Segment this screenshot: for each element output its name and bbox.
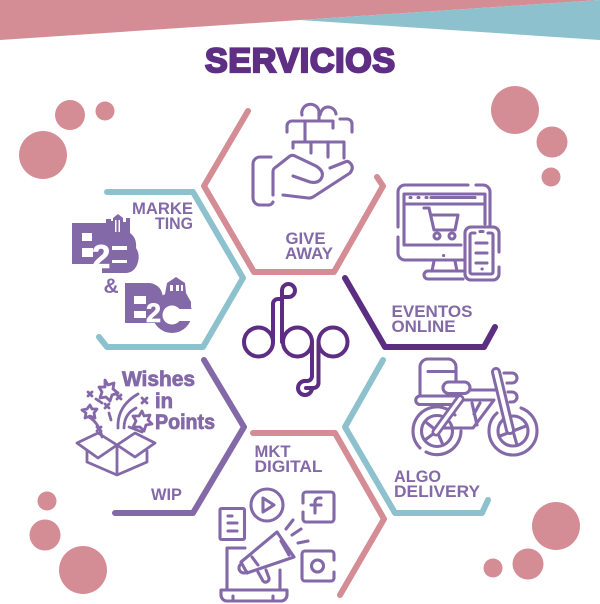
- icon: gift in hand: [253, 104, 352, 205]
- icon: delivery bike: [413, 359, 537, 455]
- panel: marketing: [72, 192, 243, 347]
- logo: dgp: [244, 284, 348, 395]
- panel: give away: [204, 104, 383, 272]
- panel: algo delivery: [345, 359, 537, 513]
- hexagon outline: marketing: [99, 192, 243, 347]
- top banner: [0, 0, 600, 40]
- label: give away: GIVE: [286, 229, 326, 248]
- panel: mkt digital: [220, 433, 384, 601]
- title: SERVICIOS: [205, 42, 395, 80]
- icon: B2B and B2C: &: [104, 275, 119, 298]
- heading: wishes in points: Wishes: [122, 368, 195, 391]
- decorative circles: bottom right: [484, 502, 580, 580]
- heading: wishes in points: [122, 368, 215, 434]
- hexagon outline: give away: [204, 111, 383, 272]
- decorative circles: bottom left: [30, 492, 107, 594]
- label: algo delivery: DELIVERY: [394, 482, 481, 501]
- hexagon outline: eventos online: [345, 278, 495, 347]
- icon: computer and phone: [398, 185, 499, 280]
- panel: eventos online: [345, 185, 499, 347]
- icon: B2B and B2C: 2: [146, 298, 161, 328]
- label: marketing: TING: [155, 214, 193, 233]
- heading: wishes in points: in: [155, 390, 173, 413]
- icon: open gift box: [77, 380, 155, 475]
- label: eventos online: EVENTOS: [392, 302, 472, 321]
- label: mkt digital: DIGITAL: [254, 457, 322, 476]
- icon: digital marketing: [220, 489, 334, 601]
- hexagon outline: algo delivery: [345, 360, 488, 513]
- label: mkt digital: MKT: [254, 442, 291, 461]
- label: marketing: MARKE: [132, 199, 193, 218]
- label: wip: WIP: [151, 485, 182, 504]
- hexagon outline: wip: [115, 360, 244, 513]
- decorative circles: top left: [19, 100, 114, 179]
- hexagon outline: mkt digital: [253, 433, 384, 595]
- icon: B2B and B2C: 2: [92, 238, 110, 275]
- decorative circles: top right: [491, 86, 568, 186]
- label: give away: AWAY: [285, 244, 334, 263]
- icon: bike fork and down tube: [436, 372, 510, 432]
- label: algo delivery: ALGO: [394, 467, 441, 486]
- label: eventos online: ONLINE: [392, 317, 456, 336]
- heading: wishes in points: Points: [155, 411, 215, 434]
- panel: wip: [77, 360, 244, 513]
- icon: B2B and B2C: [72, 214, 194, 333]
